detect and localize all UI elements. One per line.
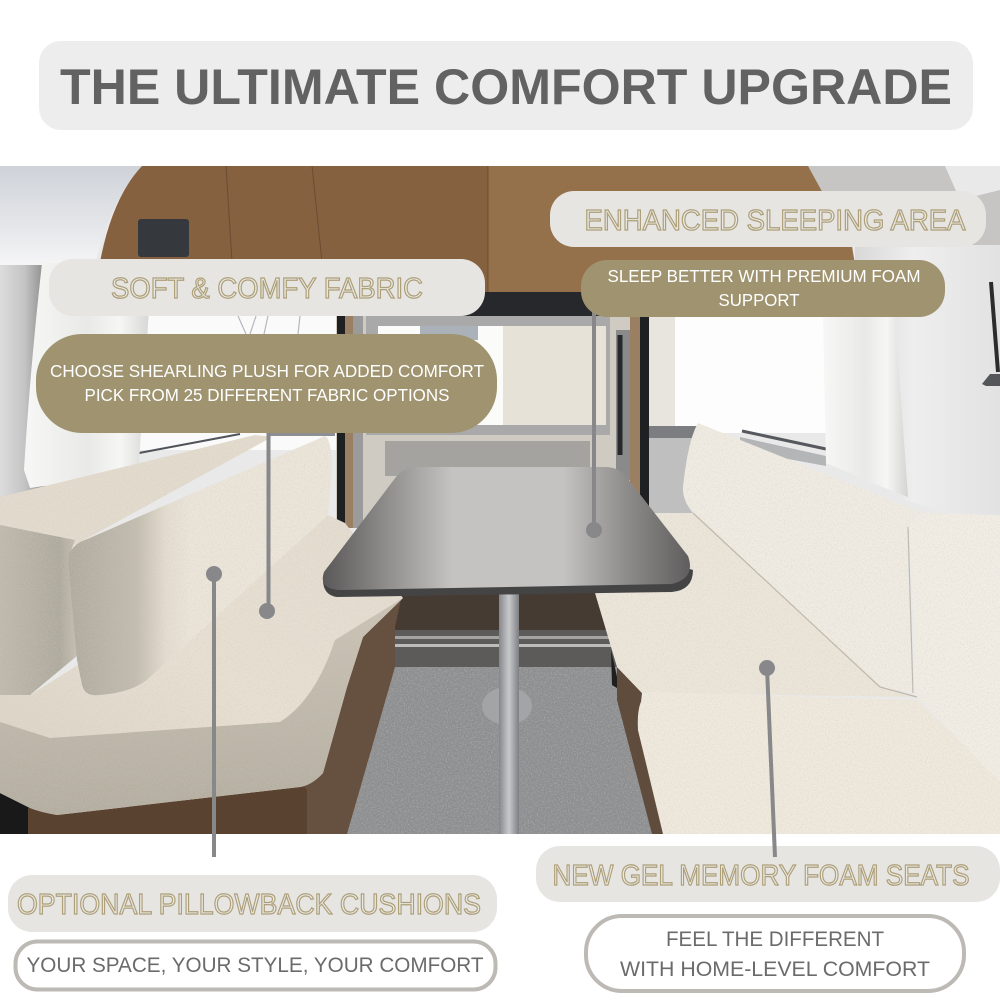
callout: sleeping area description: SLEEP BETTER WITH PREMIUM FOAM (608, 266, 920, 286)
building bricks (503, 326, 606, 425)
callout: soft & comfy fabric heading (49, 259, 485, 316)
left seat base (0, 590, 403, 834)
left inner back cushion (68, 436, 332, 695)
callout: optional pillowback cushions heading: OPTIONAL PILLOWBACK CUSHIONS (17, 889, 481, 921)
callout: soft & comfy fabric heading: SOFT & COMFY FABRIC (111, 273, 423, 305)
under-table rails (385, 630, 625, 667)
connector line: pillowback cushions (206, 566, 222, 857)
seams between right cushions (693, 513, 917, 697)
left curtain (24, 263, 152, 488)
left outer back cushion (0, 435, 272, 695)
right window (675, 317, 826, 433)
left wall (0, 265, 45, 505)
table edge (322, 569, 693, 597)
table top (323, 467, 690, 590)
right end cushion (908, 513, 1000, 782)
connector line: fabric to cushion (259, 425, 275, 619)
centre window glass (378, 326, 503, 425)
callout: enhanced sleeping area heading (550, 191, 986, 247)
left seat cushion (0, 515, 403, 815)
strap on right wall (982, 282, 1000, 386)
right sill (649, 426, 826, 514)
wood cabinets (95, 166, 488, 296)
right middle seat cushion (595, 513, 917, 697)
callout: enhanced sleeping area heading: ENHANCED SLEEPING AREA (584, 205, 966, 237)
callout: feel the different outlined pill (586, 916, 964, 991)
callout: sleeping area description: SUPPORT (718, 290, 800, 310)
centre window header (462, 292, 600, 316)
ceiling (0, 166, 142, 265)
wood grain seams (226, 166, 488, 296)
table pedestal (499, 592, 519, 834)
centre wall (336, 316, 630, 520)
right ceiling (800, 166, 1000, 250)
right black jamb (640, 316, 649, 508)
connector line: sleeping area to table (586, 312, 602, 538)
callout: fabric description: CHOOSE SHEARLING PLUSH FOR ADDED COMFORT (50, 361, 484, 381)
callout: your space outlined pill: YOUR SPACE, YOUR STYLE, YOUR COMFORT (26, 954, 484, 977)
callout: sleeping area description (581, 260, 945, 317)
left window (139, 315, 340, 453)
title banner (39, 41, 973, 130)
pedestal floor plate (482, 687, 532, 725)
floor (340, 667, 660, 834)
right seat base (611, 650, 664, 834)
callout: optional pillowback cushions heading (8, 875, 497, 932)
right curtain (823, 316, 908, 497)
under-table recess (395, 593, 606, 630)
metal panel (385, 441, 590, 476)
left black jamb (337, 316, 345, 528)
callout: your space outlined pill (16, 942, 496, 990)
centre window frame (366, 316, 610, 435)
callout: fabric description (36, 334, 497, 433)
callout: feel the different outlined pill: WITH HOME-LEVEL COMFORT (620, 958, 930, 981)
right aluminium wall (855, 245, 1000, 260)
photo: airstream dinette interior (0, 166, 1000, 834)
title banner: THE ULTIMATE COMFORT UPGRADE (60, 59, 952, 115)
callout: fabric description: PICK FROM 25 DIFFERENT FABRIC OPTIONS (84, 385, 450, 405)
connector line: memory foam seats (759, 660, 775, 857)
callout: new gel memory foam seats heading (536, 846, 1000, 902)
right front seat cushion (638, 692, 1000, 834)
right back cushion (683, 423, 923, 693)
callout: feel the different outlined pill: FEEL THE DIFFERENT (666, 928, 884, 951)
cabinet latch (138, 219, 189, 257)
left seat front face (0, 598, 403, 815)
